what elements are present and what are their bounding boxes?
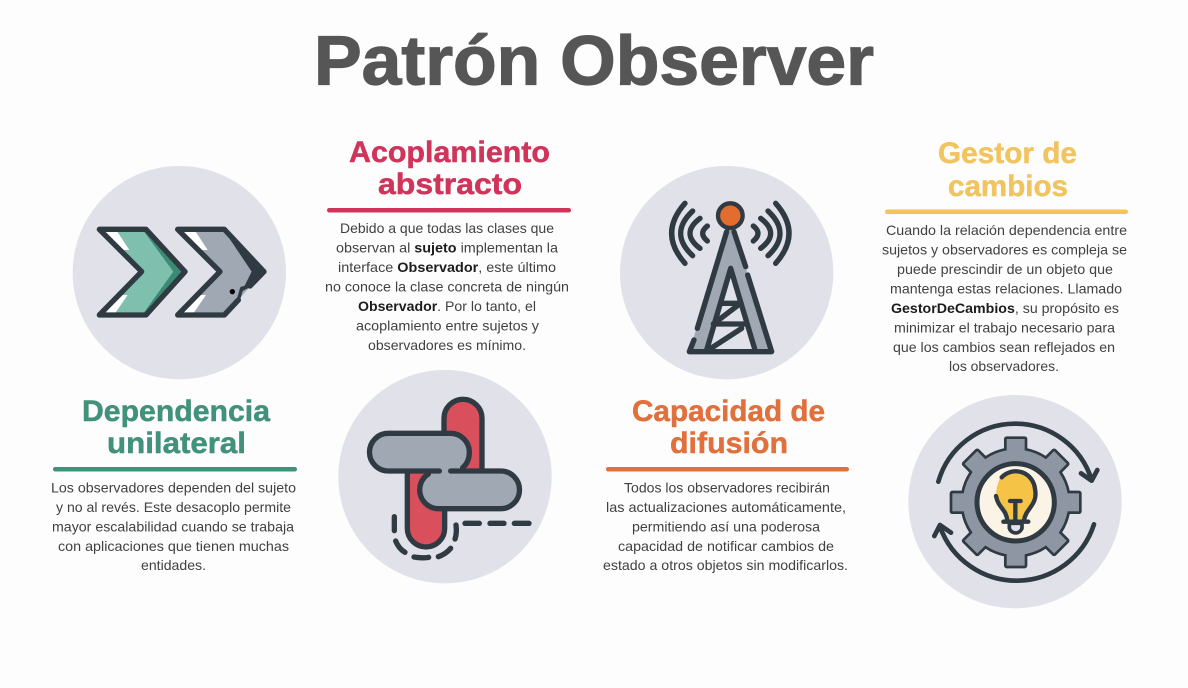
heading: dependencia unilateral: unilateral: [107, 427, 246, 460]
icon: antenna tower: [620, 166, 833, 379]
heading: capacidad de difusión: Capacidad de: [632, 395, 825, 428]
panel: acoplamiento abstracto: [325, 136, 571, 583]
rule: [53, 467, 297, 472]
text: acoplamiento abstracto: observadores es mínimo.: [368, 337, 526, 353]
heading: acoplamiento abstracto: abstracto: [378, 168, 522, 201]
panel: capacidad de difusión: [603, 166, 849, 573]
rule: [327, 208, 571, 212]
icon: interlocked links: [338, 370, 552, 583]
rule: [885, 210, 1128, 214]
text: dependencia unilateral: con aplicaciones que tienen muchas: [58, 538, 289, 554]
text: dependencia unilateral: y no al revés. Este desacoplo permite: [56, 499, 291, 515]
text: gestor de cambios: minimizar el trabajo necesario para: [894, 320, 1115, 336]
panel: gestor de cambios: [882, 137, 1128, 608]
heading: acoplamiento abstracto: [349, 136, 550, 201]
title: Patrón Observer: [314, 22, 874, 100]
text: dependencia unilateral: [51, 480, 296, 573]
text: gestor de cambios: sujetos y observadores es compleja se: [882, 242, 1127, 258]
text: gestor de cambios: GestorDeCambios, su propósito es: [891, 300, 1119, 316]
text: gestor de cambios: puede prescindir de un objeto que: [897, 261, 1113, 277]
text: dependencia unilateral: mayor escalabilidad cuando se trabaja: [52, 518, 294, 534]
text: acoplamiento abstracto: interface Observador, este último: [338, 259, 556, 275]
text: acoplamiento abstracto: no conoce la clase concreta de ningún: [325, 278, 569, 294]
panel: dependencia unilateral: [51, 166, 297, 573]
heading: dependencia unilateral: [82, 395, 270, 460]
text: capacidad de difusión: Todos los observadores recibirán: [624, 480, 830, 496]
text: acoplamiento abstracto: observan al sujeto implementan la: [336, 240, 558, 256]
text: acoplamiento abstracto: Observador. Por lo tanto, el: [358, 298, 536, 314]
text: capacidad de difusión: permitiendo así una poderosa: [632, 518, 820, 534]
heading: gestor de cambios: cambios: [948, 170, 1068, 203]
text: dependencia unilateral: Los observadores dependen del sujeto: [51, 480, 296, 496]
text: gestor de cambios: que los cambios sean reflejados en: [893, 339, 1115, 355]
text: capacidad de difusión: capacidad de notificar cambios de: [618, 538, 834, 554]
text: capacidad de difusión: las actualizaciones automáticamente,: [606, 499, 846, 515]
icon: double chevron: [73, 166, 286, 379]
heading: dependencia unilateral: Dependencia: [82, 395, 270, 428]
heading: capacidad de difusión: difusión: [670, 427, 788, 460]
icon: gear with light bulb: [908, 395, 1122, 608]
heading: acoplamiento abstracto: Acoplamiento: [349, 136, 550, 169]
heading: capacidad de difusión: [632, 395, 825, 460]
text: gestor de cambios: Cuando la relación dependencia entre: [886, 222, 1127, 238]
text: capacidad de difusión: estado a otros objetos sin modificarlos.: [603, 557, 848, 573]
rule: [606, 467, 849, 472]
text: acoplamiento abstracto: [325, 220, 569, 353]
text: acoplamiento abstracto: acoplamiento entre sujetos y: [356, 318, 539, 334]
heading: gestor de cambios: [938, 137, 1077, 203]
text: acoplamiento abstracto: Debido a que todas las clases que: [340, 220, 554, 236]
text: gestor de cambios: los observadores.: [949, 358, 1059, 374]
text: capacidad de difusión: [603, 480, 848, 573]
heading: gestor de cambios: Gestor de: [938, 137, 1077, 170]
text: gestor de cambios: mantenga estas relaciones. Llamado: [890, 280, 1122, 296]
text: gestor de cambios: [882, 222, 1127, 374]
text: dependencia unilateral: entidades.: [141, 557, 206, 573]
